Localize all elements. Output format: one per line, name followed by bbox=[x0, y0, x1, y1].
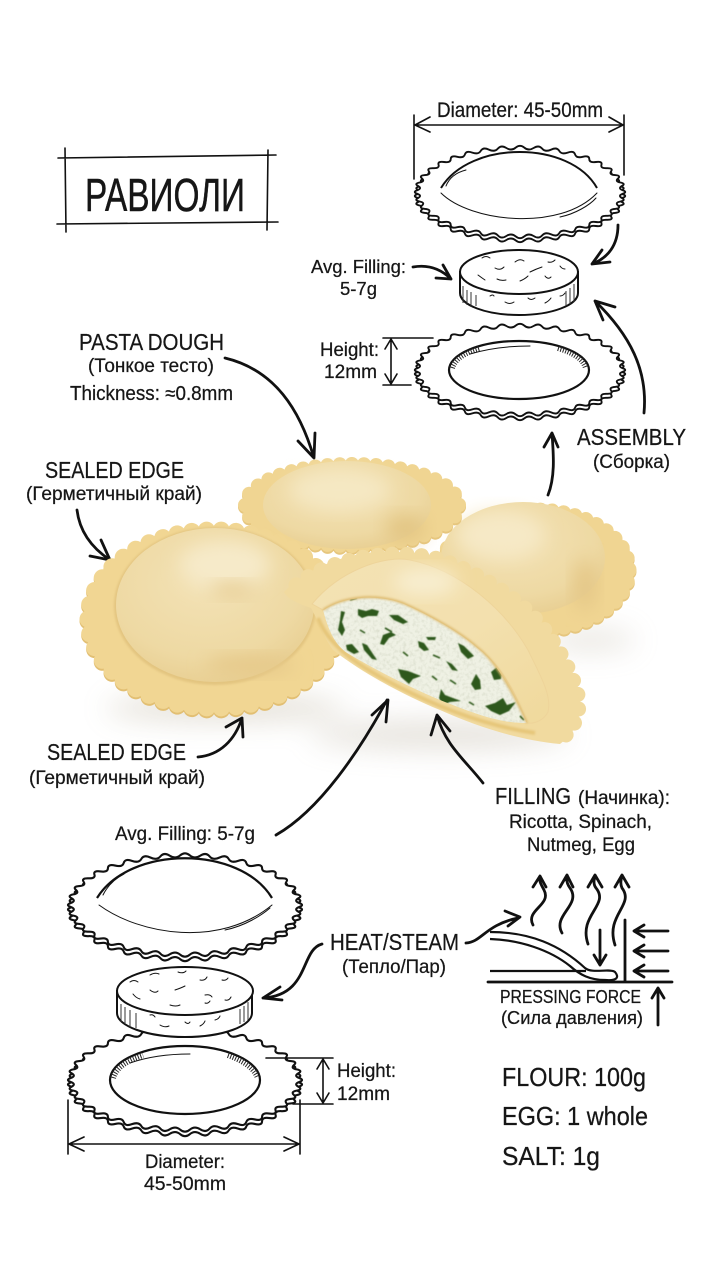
height dimension: Height: bbox=[337, 1061, 396, 1082]
label: sealed edge lower: (Герметичный край) bbox=[29, 768, 205, 789]
diameter dimension: Diameter: bbox=[145, 1152, 225, 1173]
photo: ravioli group bbox=[88, 461, 635, 749]
avg filling label and arrow bbox=[311, 256, 451, 299]
label: assembly: ASSEMBLY bbox=[577, 424, 686, 450]
label: filling ingredients: Nutmeg, Egg bbox=[527, 835, 635, 856]
title: РАВИОЛИ in sketched frame: РАВИОЛИ bbox=[85, 169, 245, 221]
label: heat steam: (Тепло/Пар) bbox=[342, 957, 446, 978]
label: pasta dough: PASTA DOUGH bbox=[79, 329, 224, 355]
dough profile bbox=[490, 932, 617, 980]
diagram: pressing seal cross-section bbox=[466, 875, 672, 1028]
filling disc bbox=[460, 250, 578, 315]
label: filling ingredients: (Начинка): bbox=[578, 788, 670, 809]
arrow: heat to disc bbox=[263, 944, 322, 1000]
label: heat steam bbox=[330, 929, 459, 978]
label: filling ingredients: FILLING bbox=[495, 783, 571, 809]
edge scallops bbox=[296, 554, 579, 735]
label: filling ingredients: Ricotta, Spinach, bbox=[509, 812, 652, 833]
label: assembly bbox=[577, 424, 686, 473]
bottom pasta sheet with hole bbox=[415, 324, 625, 420]
arrow: pasta dough bbox=[225, 358, 315, 458]
lower rim bbox=[318, 618, 535, 733]
label: avg filling lower: Avg. Filling: 5-7g bbox=[115, 824, 255, 845]
cast shadow bbox=[105, 630, 635, 749]
label: sealed edge lower: SEALED EDGE bbox=[47, 739, 186, 765]
height dimension bbox=[320, 338, 433, 385]
top dome over filling bbox=[312, 559, 549, 723]
height dimension: 12mm bbox=[324, 362, 377, 383]
label: assembly: (Сборка) bbox=[593, 452, 670, 473]
arrow: avg filling to photo bbox=[276, 700, 388, 835]
pressing force label: PRESSING FORCE bbox=[500, 987, 641, 1007]
swoosh arrow bbox=[466, 911, 520, 943]
filling disc bbox=[117, 967, 253, 1037]
recipe list: SALT: 1g bbox=[502, 1141, 600, 1171]
arrow: top sheet to disc bbox=[592, 225, 618, 264]
label: pasta dough: (Тонкое тесто) bbox=[88, 356, 214, 377]
bottom pasta with hole bbox=[68, 1028, 302, 1136]
steam arrows bbox=[532, 875, 629, 945]
arrow: sealed edge lower bbox=[198, 718, 243, 757]
top diameter dimension bbox=[414, 99, 624, 179]
recipe list: EGG: 1 whole bbox=[502, 1101, 648, 1131]
filling bbox=[323, 598, 526, 723]
arrow: assembly large curve bbox=[595, 301, 645, 413]
diameter dimension: 45-50mm bbox=[144, 1174, 226, 1195]
avg filling label and arrow: Avg. Filling: bbox=[311, 256, 406, 277]
label: pasta dough bbox=[70, 329, 233, 405]
recipe list bbox=[502, 1062, 648, 1171]
height dimension: 12mm bbox=[337, 1084, 390, 1105]
label: filling ingredients bbox=[495, 783, 670, 856]
height dimension bbox=[266, 1058, 396, 1105]
raviolo: cut front with filling bbox=[284, 552, 579, 744]
avg filling label and arrow: 5-7g bbox=[340, 278, 377, 299]
diameter dimension bbox=[68, 1100, 300, 1195]
diagram: bottom exploded view bbox=[68, 853, 396, 1195]
pressing force label bbox=[500, 987, 643, 1028]
label: sealed edge upper: SEALED EDGE bbox=[45, 457, 184, 483]
arrow: assembly small curve bbox=[544, 433, 558, 495]
force arrows bbox=[488, 920, 672, 1025]
raviolo: back right bbox=[441, 502, 629, 632]
diagram: top assembly exploded view bbox=[311, 99, 625, 420]
top diameter dimension: Diameter: 45-50mm bbox=[437, 99, 603, 122]
raviolo: large left bbox=[88, 527, 340, 710]
title: РАВИОЛИ in sketched frame bbox=[57, 148, 278, 232]
recipe list: FLOUR: 100g bbox=[502, 1062, 646, 1092]
height dimension: Height: bbox=[320, 340, 379, 361]
label: sealed edge upper: (Герметичный край) bbox=[26, 484, 202, 505]
top pasta dome bbox=[68, 853, 302, 961]
pressing force label: (Сила давления) bbox=[501, 1008, 643, 1028]
label: pasta dough: Thickness: ≈0.8mm bbox=[70, 383, 233, 405]
label: sealed edge upper bbox=[26, 457, 202, 505]
pasta body bbox=[284, 552, 579, 744]
label: sealed edge lower bbox=[29, 739, 205, 789]
raviolo: back top bbox=[245, 461, 459, 549]
label: heat steam: HEAT/STEAM bbox=[330, 929, 459, 955]
top pasta sheet with dome bbox=[415, 146, 625, 242]
arrow: filling bbox=[431, 715, 483, 783]
arrow: sealed edge upper bbox=[77, 510, 110, 560]
